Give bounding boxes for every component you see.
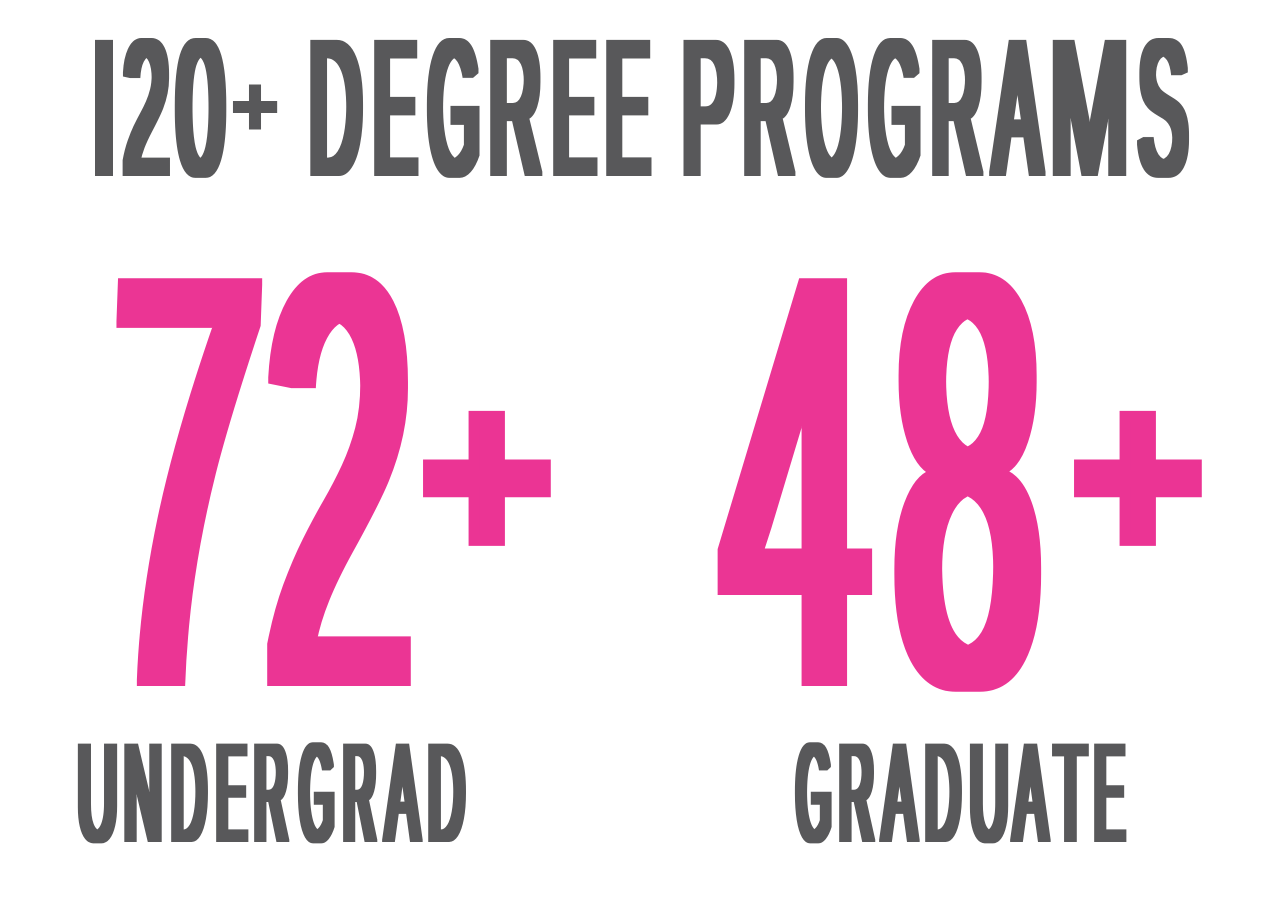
title: 0	[176, 0, 225, 215]
text: S	[1139, 0, 1187, 215]
label: graduate: A	[1014, 714, 1047, 871]
title: G	[429, 0, 479, 215]
stat: 48+ graduate: 8	[895, 154, 1040, 807]
title: O	[807, 0, 856, 215]
title: P	[682, 0, 734, 215]
text: D	[428, 714, 464, 871]
title: R	[744, 0, 794, 215]
title: M	[1050, 0, 1129, 215]
label: graduate: A	[883, 714, 916, 871]
text: E	[1094, 714, 1124, 871]
label: graduate: G	[797, 714, 831, 871]
title: E	[606, 0, 649, 215]
title: E	[374, 0, 416, 215]
label: undergrad: R	[344, 714, 375, 871]
title: +	[231, 60, 279, 153]
title: R	[932, 0, 982, 215]
label: undergrad: A	[386, 714, 419, 871]
stat: 48+ graduate: 4	[724, 154, 868, 807]
stat: 48+ graduate	[724, 154, 1206, 807]
label: undergrad: D	[171, 714, 206, 871]
label: undergrad: G	[300, 714, 334, 871]
title: A	[994, 0, 1041, 215]
title: 2	[124, 0, 169, 215]
label: undergrad: R	[254, 714, 288, 871]
label: graduate: T	[1055, 714, 1086, 871]
stat: 72+ undergrad: +	[418, 338, 555, 612]
label: graduate	[797, 714, 1124, 871]
label: undergrad: E	[216, 714, 246, 871]
label: graduate: D	[925, 714, 960, 871]
title: R	[489, 0, 541, 215]
label: undergrad	[78, 714, 464, 871]
label: undergrad: U	[78, 714, 117, 871]
stat: 72+ undergrad: 7	[97, 154, 268, 807]
label: graduate: R	[839, 714, 874, 871]
stat: 48+ graduate: +	[1070, 338, 1206, 612]
title: 1	[72, 0, 131, 215]
title: D	[309, 0, 362, 215]
label: graduate: U	[970, 714, 1008, 871]
title: G	[870, 0, 920, 215]
stat: 72+ undergrad: 2	[266, 154, 412, 807]
title: E	[553, 0, 595, 215]
label: undergrad: N	[124, 714, 162, 871]
title	[95, 38, 1190, 178]
